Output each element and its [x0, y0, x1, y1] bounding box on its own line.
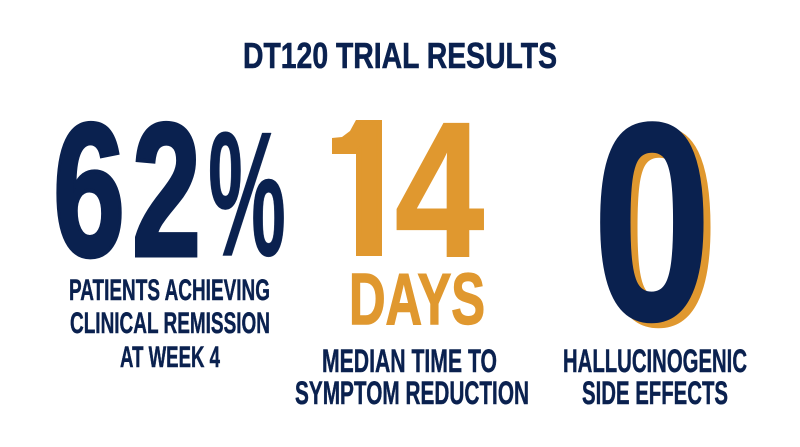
label: patients achieving clinical remission	[69, 274, 270, 374]
stat: 14: 4	[395, 82, 484, 297]
stat: 14: 1	[332, 82, 400, 297]
stat: 62%: 2	[132, 84, 201, 296]
stat unit: days: DAYS	[349, 260, 485, 340]
stat: 0 with orange shadow: 0	[592, 64, 712, 381]
label: patients achieving clinical remission: PATIENTS ACHIEVING	[69, 274, 270, 307]
panel: 62% remission	[53, 84, 286, 374]
panel: zero side effects	[563, 64, 747, 411]
label: median time to symptom reduction: SYMPTOM REDUCTION	[295, 375, 529, 411]
stat: 62%	[53, 84, 286, 296]
stat: 0 with orange shadow: 0	[599, 69, 719, 386]
label: median time to symptom reduction: MEDIAN TIME TO	[322, 343, 497, 379]
label: patients achieving clinical remission: AT WEEK 4	[120, 341, 220, 374]
label: median time to symptom reduction	[295, 343, 529, 411]
text: %	[208, 94, 286, 294]
stat: 62%: 6	[53, 84, 125, 296]
stat: 14	[332, 120, 484, 257]
label: patients achieving clinical remission: CLINICAL REMISSION	[70, 307, 270, 340]
label: hallucinogenic side effects	[563, 343, 747, 411]
title: DT120 TRIAL RESULTS	[243, 35, 557, 76]
panel: 14 days	[295, 120, 528, 404]
